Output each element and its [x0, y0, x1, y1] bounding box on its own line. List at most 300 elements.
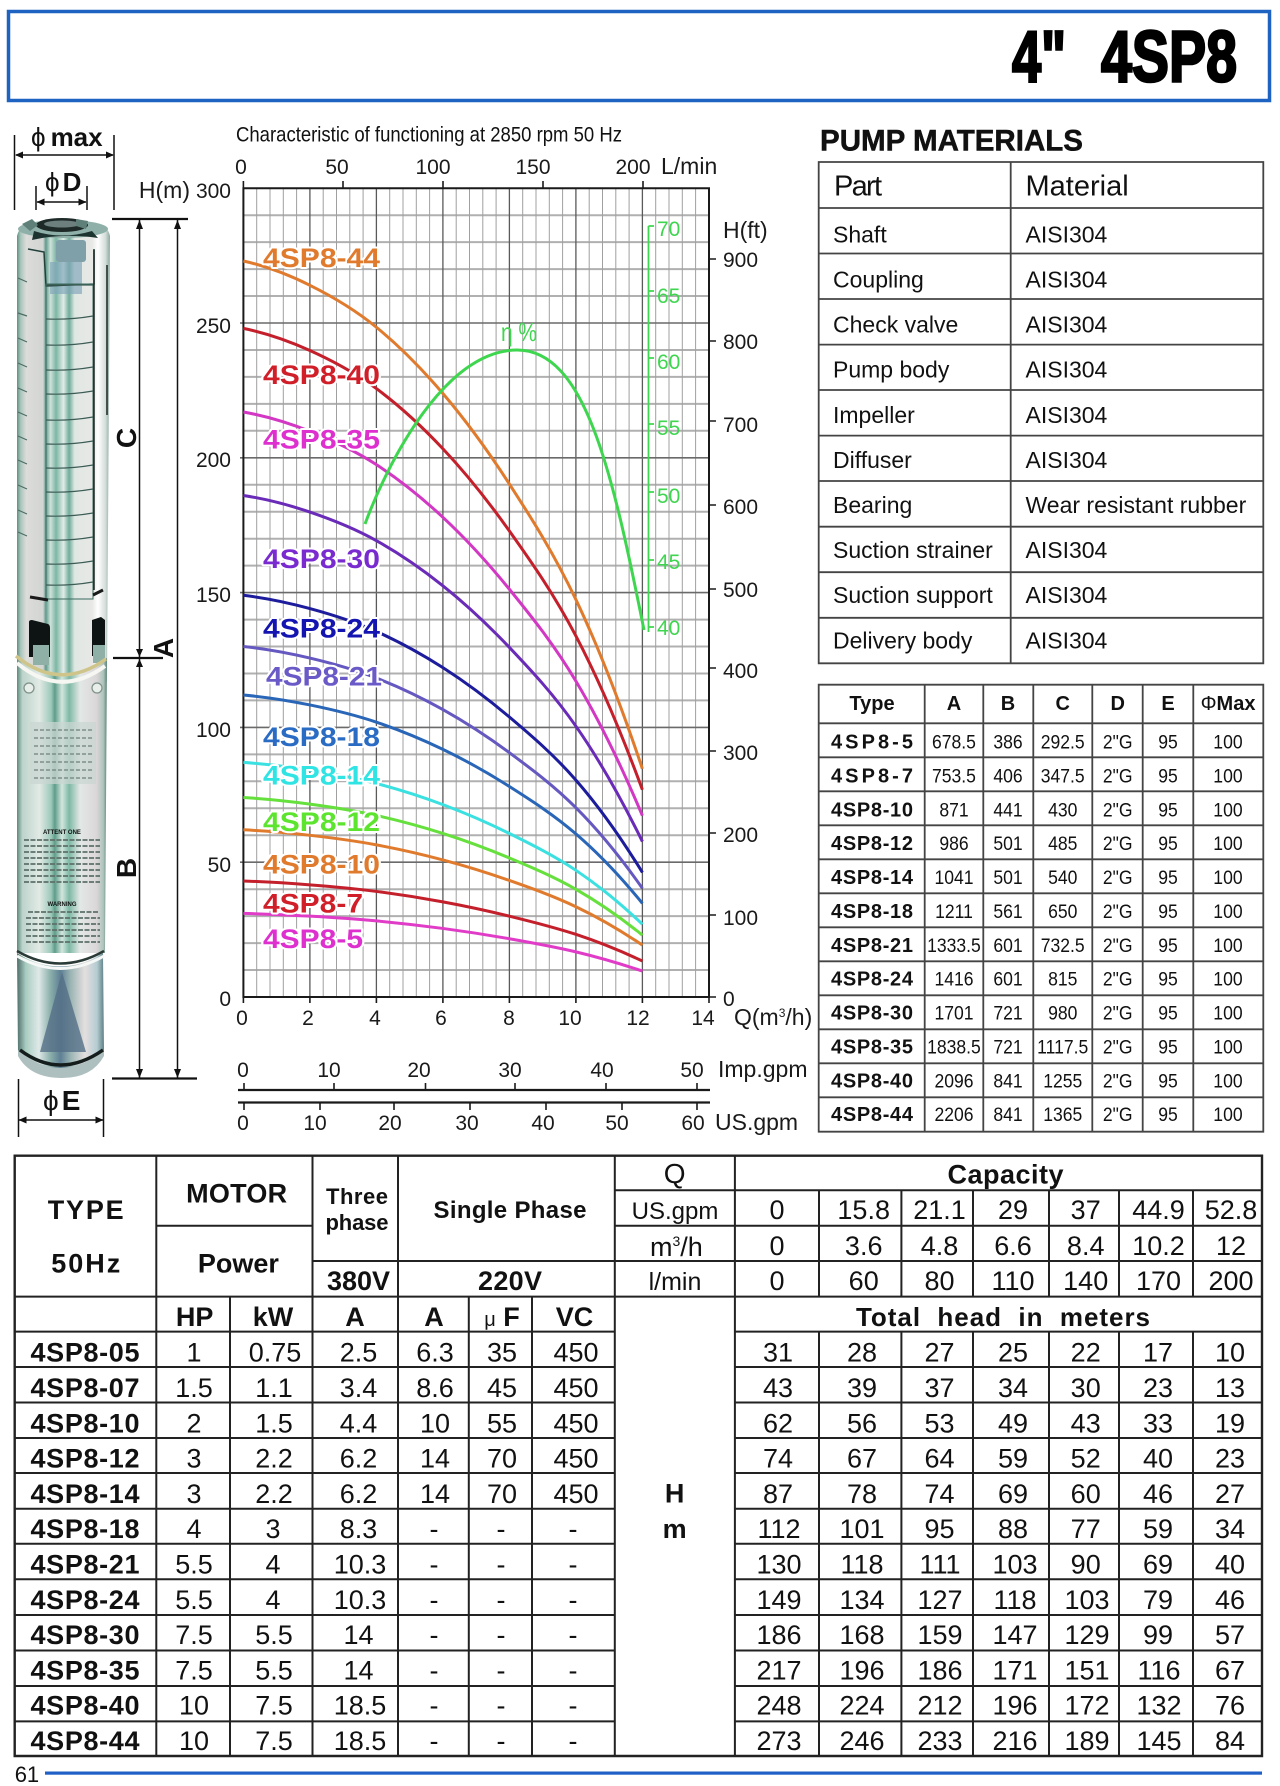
pump curve: 4SP8-10	[243, 830, 642, 945]
total head values: 186	[756, 1620, 802, 1650]
right axis H(ft): 600	[723, 496, 758, 519]
type column: 4SP8-35	[30, 1655, 140, 1685]
total head values: 168	[839, 1620, 885, 1650]
motor electrical values: 14	[420, 1479, 450, 1509]
bottom axis Q: 14	[691, 1007, 715, 1030]
total head values: 118	[840, 1550, 884, 1580]
capacity headers: 3.6	[845, 1231, 882, 1261]
US.gpm scale: US.gpm	[715, 1109, 798, 1135]
curve label: 4SP8-18: 4SP8-18	[263, 722, 380, 752]
motor electrical values: 1.1	[255, 1373, 293, 1403]
dimension lines A, B, C	[111, 219, 197, 1078]
capacity headers: 29	[998, 1195, 1028, 1225]
efficiency scale: 40	[657, 617, 680, 640]
motor electrical values: 10.3	[334, 1550, 386, 1580]
motor electrical values: -	[496, 1620, 506, 1650]
dimensions type column: 4SP8-10	[831, 799, 913, 821]
dimensions values: 601	[993, 968, 1023, 990]
motor electrical values: 4.4	[340, 1408, 377, 1438]
total head values: 28	[847, 1338, 877, 1368]
materials table	[819, 162, 1263, 663]
motor electrical values: 1	[186, 1338, 202, 1368]
total head values: 103	[992, 1550, 1038, 1580]
bottom axis Q: 4	[369, 1007, 381, 1030]
motor electrical values: 55	[487, 1408, 517, 1438]
total head values: 78	[847, 1479, 877, 1509]
materials table: Diffuser	[833, 447, 912, 473]
curve label: 4SP8-12: 4SP8-12	[263, 807, 380, 837]
performance chart	[139, 124, 812, 1135]
dimensions values: 100	[1213, 798, 1243, 821]
top axis L/min: 100	[415, 156, 451, 179]
dimensions values: 2"G	[1103, 968, 1133, 990]
motor electrical values: -	[568, 1550, 578, 1580]
total head values: 10	[1215, 1338, 1245, 1368]
materials table: Pump body	[833, 357, 950, 383]
materials table: AISI304	[1026, 221, 1108, 247]
bottom axis Q: 6	[435, 1007, 447, 1030]
dimensions values: 678.5	[932, 731, 976, 753]
dimensions values: 980	[1048, 1002, 1077, 1024]
total head values: 27	[1215, 1479, 1245, 1509]
total head values: 186	[917, 1655, 963, 1685]
dimensions values: 347.5	[1041, 765, 1085, 787]
total head values: 69	[998, 1479, 1028, 1509]
capacity headers: 110	[991, 1266, 1035, 1296]
materials table: Suction strainer	[833, 537, 993, 563]
panel: pump materials	[819, 124, 1263, 663]
right axis H(ft): 500	[723, 579, 758, 602]
dimensions values: 292.5	[1041, 731, 1085, 753]
capacity headers: 10.2	[1132, 1231, 1185, 1261]
capacity headers: H	[665, 1479, 684, 1509]
dimensions values: 2"G	[1103, 866, 1133, 888]
motor electrical values: 8.6	[416, 1373, 454, 1403]
dimensions header row: E	[1161, 693, 1175, 715]
header cells: 50Hz	[51, 1249, 120, 1279]
top axis L/min: L/min	[661, 153, 717, 179]
curve label: 4SP8-24: 4SP8-24	[263, 614, 380, 644]
dimensions values: 100	[1213, 1069, 1243, 1092]
capacity headers: Q	[664, 1158, 685, 1189]
motor electrical values: -	[430, 1726, 438, 1756]
header banner	[8, 12, 1270, 100]
motor electrical values: 70	[487, 1479, 517, 1509]
motor electrical values: 1.5	[255, 1408, 293, 1438]
pump curve: 4SP8-24	[243, 595, 642, 872]
dimensions values: 95	[1158, 1069, 1178, 1092]
type column: 4SP8-18	[30, 1514, 140, 1544]
capacity headers: 8.4	[1067, 1231, 1104, 1261]
motor electrical values: 5.5	[175, 1550, 213, 1580]
motor electrical values: 2	[186, 1408, 202, 1438]
total head values: 25	[998, 1338, 1028, 1368]
dimensions type column: 4SP8-35	[831, 1036, 913, 1058]
dimensions values: 100	[1213, 832, 1243, 854]
materials table: AISI304	[1026, 357, 1108, 383]
motor electrical values: 4	[186, 1514, 202, 1544]
top axis L/min: 0	[235, 156, 247, 179]
materials table: AISI304	[1026, 627, 1108, 653]
dimensions header row: C	[1055, 693, 1070, 715]
Imp.gpm scale: Imp.gpm	[718, 1056, 807, 1082]
US.gpm scale: 40	[531, 1112, 555, 1135]
table: motor and head performance	[15, 1156, 1262, 1756]
dimension: phi max: ϕmax	[31, 122, 103, 152]
dimensions values: 1255	[1043, 1069, 1082, 1092]
curve label: 4SP8-35: 4SP8-35	[263, 424, 380, 454]
efficiency scale: 65	[657, 285, 680, 308]
motor electrical values: -	[568, 1514, 578, 1544]
right axis H(ft): 100	[723, 907, 758, 930]
title	[1012, 18, 1237, 98]
capacity headers	[632, 1158, 1257, 1544]
motor electrical values: 3	[186, 1444, 202, 1474]
pump rating plate	[30, 722, 96, 784]
materials table: Bearing	[833, 492, 912, 518]
capacity headers: 4.8	[921, 1231, 958, 1261]
total head values: 95	[924, 1514, 955, 1544]
right axis H(ft): 900	[723, 249, 758, 272]
total head values: 39	[847, 1373, 877, 1403]
pump curve: 4SP8-12	[243, 798, 642, 935]
header cells: VC	[556, 1302, 593, 1332]
motor electrical values: -	[430, 1655, 438, 1685]
dimensions values: 721	[993, 1036, 1023, 1058]
total head values: 59	[1143, 1514, 1173, 1544]
dimensions values: 871	[939, 798, 969, 821]
total head values: 99	[1143, 1620, 1173, 1650]
efficiency scale: 60	[657, 351, 680, 374]
dimensions values: 2"G	[1103, 798, 1133, 821]
efficiency scale: 45	[657, 551, 680, 574]
capacity headers: m	[663, 1514, 687, 1544]
total head values: 60	[1071, 1479, 1101, 1509]
total head values: 23	[1143, 1373, 1173, 1403]
capacity headers: 140	[1063, 1266, 1108, 1296]
dimensions values: 95	[1158, 1002, 1178, 1024]
motor electrical values: 3	[186, 1479, 202, 1509]
total head values: 116	[1137, 1655, 1181, 1685]
type column: 4SP8-12	[30, 1444, 140, 1474]
motor electrical values: 14	[343, 1655, 374, 1685]
total head values: 88	[998, 1514, 1028, 1544]
motor electrical values: 2.5	[340, 1338, 377, 1368]
pump curve: 4SP8-30	[243, 496, 642, 842]
dimensions values: 100	[1213, 1103, 1243, 1125]
total head values: 43	[763, 1373, 793, 1403]
dimensions header row: Type	[849, 693, 895, 715]
total head values: 112	[757, 1514, 801, 1544]
total head values: 49	[998, 1408, 1028, 1438]
pump curve: 4SP8-40	[243, 328, 642, 790]
dimensions values: 2"G	[1103, 1036, 1133, 1058]
total head values: 76	[1215, 1691, 1245, 1721]
motor electrical values: 5.5	[255, 1620, 293, 1650]
dimensions values: 501	[993, 832, 1023, 854]
motor electrical values: -	[430, 1620, 438, 1650]
capacity headers: 15.8	[837, 1195, 890, 1225]
curve label: 4SP8-10: 4SP8-10	[263, 850, 380, 880]
type column: 4SP8-44	[30, 1726, 140, 1756]
motor electrical values: -	[430, 1550, 438, 1580]
total head values: 129	[1064, 1620, 1110, 1650]
dimensions values: 95	[1158, 866, 1178, 888]
dimension: phi D: ϕD	[45, 167, 81, 197]
motor electrical values: 3	[265, 1514, 281, 1544]
motor electrical values: 4	[265, 1550, 281, 1580]
motor electrical values: 6.2	[340, 1444, 377, 1474]
type column: 4SP8-40	[30, 1691, 140, 1721]
dimensions values: 95	[1158, 1036, 1178, 1058]
curve label: 4SP8-40: 4SP8-40	[263, 360, 380, 390]
motor electrical values: 7.5	[255, 1691, 293, 1721]
header cells: Power	[198, 1249, 279, 1279]
materials table: AISI304	[1026, 312, 1108, 338]
dimension: phi E	[18, 1079, 104, 1137]
header cells	[48, 1179, 593, 1332]
total head values: 30	[1071, 1373, 1101, 1403]
total head values: 40	[1215, 1550, 1245, 1580]
left axis H(m): 50	[208, 854, 231, 877]
dimensions values: 753.5	[932, 765, 976, 787]
total head values: 22	[1071, 1338, 1101, 1368]
materials table: Part	[834, 171, 882, 203]
dimensions values: 406	[993, 765, 1023, 787]
total head values: 19	[1215, 1408, 1245, 1438]
curve label: 4SP8-21: 4SP8-21	[266, 662, 382, 692]
motor electrical values: 10	[420, 1408, 450, 1438]
motor electrical values: 5.5	[175, 1585, 213, 1615]
dimensions values: 100	[1213, 968, 1243, 990]
capacity headers: 170	[1136, 1266, 1181, 1296]
bottom axis Q: 8	[503, 1007, 515, 1030]
capacity headers: /h	[680, 1232, 703, 1262]
motor electrical values: -	[496, 1655, 506, 1685]
title: 4SP8	[1101, 18, 1237, 98]
motor electrical values: -	[568, 1585, 578, 1615]
pump warning text	[24, 830, 100, 942]
dimensions values: 100	[1213, 765, 1243, 787]
dimensions values: 2"G	[1103, 934, 1133, 956]
motor electrical values: 4	[265, 1585, 281, 1615]
header cells: μ F	[484, 1302, 520, 1332]
motor electrical values: 2.2	[255, 1444, 293, 1474]
type column: 4SP8-30	[30, 1620, 140, 1650]
motor electrical values: 450	[553, 1373, 599, 1403]
motor electrical values: 7.5	[175, 1620, 213, 1650]
US.gpm scale: 60	[681, 1112, 705, 1135]
efficiency curve	[365, 350, 644, 630]
total head values: 56	[847, 1408, 877, 1438]
total head values: 74	[924, 1479, 955, 1509]
total head values: 46	[1143, 1479, 1173, 1509]
type column: 4SP8-10	[30, 1408, 140, 1438]
capacity headers: 6.6	[994, 1231, 1032, 1261]
total head values: 246	[839, 1726, 885, 1756]
materials table: AISI304	[1026, 582, 1108, 608]
dimensions values: 100	[1213, 1036, 1243, 1058]
total head values: 77	[1071, 1514, 1101, 1544]
header cells: A	[345, 1302, 365, 1332]
capacity headers: 80	[924, 1266, 955, 1296]
header cells: kW	[253, 1302, 294, 1332]
Imp.gpm scale: 20	[407, 1059, 431, 1082]
motor electrical values: 7.5	[175, 1655, 213, 1685]
total head values: 196	[992, 1691, 1038, 1721]
total head values: 40	[1143, 1444, 1173, 1474]
efficiency scale: 50	[657, 485, 680, 508]
dimensions values: 1333.5	[927, 934, 981, 956]
dimensions type column	[831, 732, 914, 1126]
pump curve: 4SP8-5	[243, 913, 642, 971]
dimensions values: 601	[993, 934, 1023, 956]
pump warning text: WARNING	[48, 902, 77, 908]
right axis H(ft): H(ft)	[723, 217, 768, 243]
motor electrical values: -	[496, 1691, 506, 1721]
footer: page number and rule	[15, 1762, 1262, 1786]
materials table: AISI304	[1026, 266, 1108, 292]
motor electrical values: 5.5	[255, 1655, 293, 1685]
dimensions values: 100	[1213, 934, 1243, 956]
motor electrical values: -	[430, 1514, 438, 1544]
materials table: Wear resistant rubber	[1026, 492, 1247, 518]
header cells: TYPE	[48, 1195, 124, 1225]
total head values: 172	[1064, 1691, 1110, 1721]
motor electrical values: 10	[179, 1726, 209, 1756]
capacity headers: 3	[672, 1233, 680, 1249]
dimensions values: 100	[1213, 866, 1243, 888]
efficiency scale	[648, 218, 680, 640]
dimensions values: 721	[993, 1002, 1023, 1024]
motor electrical values: 18.5	[334, 1726, 386, 1756]
dimensions values: 1211	[935, 900, 973, 922]
bottom axis Q: 10	[558, 1007, 582, 1030]
total head values: 52	[1071, 1444, 1101, 1474]
curve label: 4SP8-14: 4SP8-14	[263, 761, 380, 791]
left axis H(m): 0	[219, 988, 231, 1011]
motor electrical values: 0.75	[249, 1338, 301, 1368]
motor electrical values: -	[568, 1620, 578, 1650]
total head values: 43	[1071, 1408, 1101, 1438]
pump curve: 4SP8-44	[243, 261, 642, 769]
capacity headers: 52.8	[1205, 1195, 1257, 1225]
bottom axis Q: 0	[236, 1007, 248, 1030]
total head values: 59	[998, 1444, 1028, 1474]
dimensions values: 561	[993, 900, 1023, 922]
total head values: 13	[1215, 1373, 1245, 1403]
materials table: Delivery body	[833, 627, 973, 653]
motor electrical values: 1.5	[175, 1373, 213, 1403]
total head values: 149	[756, 1585, 802, 1615]
dimensions values: 986	[939, 832, 969, 854]
dimension lines A, B, C: A	[148, 638, 179, 658]
motor electrical values: 18.5	[334, 1691, 386, 1721]
motor electrical values: 14	[420, 1444, 450, 1474]
total head values: 67	[847, 1444, 877, 1474]
pump curve: 4SP8-18	[243, 695, 642, 903]
pump illustration with dimension lines	[14, 122, 197, 1137]
dimensions type column: 4SP8-24	[831, 969, 914, 991]
header cells: A	[424, 1302, 444, 1332]
motor electrical values: 10.3	[334, 1585, 386, 1615]
total head values: 118	[993, 1585, 1037, 1615]
motor electrical values: 450	[553, 1338, 599, 1368]
Imp.gpm scale: 10	[317, 1059, 341, 1082]
materials table: AISI304	[1026, 447, 1108, 473]
total head values: 74	[763, 1444, 793, 1474]
motor electrical values: -	[496, 1550, 506, 1580]
total head values: 130	[756, 1550, 802, 1580]
US.gpm scale	[237, 1102, 798, 1135]
motor electrical values: -	[430, 1691, 438, 1721]
bottom axis Q: 3	[779, 1006, 786, 1020]
Imp.gpm scale: 50	[680, 1059, 704, 1082]
US.gpm scale: 0	[237, 1112, 249, 1135]
total head values: 196	[839, 1655, 885, 1685]
dimensions values: 2"G	[1103, 1103, 1133, 1125]
dimension lines A, B, C: B	[111, 858, 142, 878]
dimensions type column: 4SP8-44	[831, 1104, 914, 1126]
dimensions values: 1041	[934, 866, 974, 888]
dimensions values: 732.5	[1041, 934, 1085, 956]
capacity headers: 44.9	[1132, 1195, 1185, 1225]
dimensions values: 2"G	[1103, 1002, 1133, 1024]
bottom axis Q: 12	[626, 1007, 650, 1030]
dimensions type column: 4SP8-14	[831, 867, 914, 889]
motor electrical values	[175, 1338, 599, 1756]
left axis H(m): 250	[196, 315, 231, 338]
dimensions values: 1117.5	[1037, 1036, 1088, 1058]
total head values: 127	[917, 1585, 963, 1615]
dimensions values: 441	[993, 798, 1023, 821]
dimensions values: 841	[993, 1103, 1023, 1125]
total head values: 101	[839, 1514, 885, 1544]
pump curve: 4SP8-35	[243, 412, 642, 816]
total head values: 224	[839, 1691, 885, 1721]
total head values: 64	[924, 1444, 955, 1474]
left axis H(m): 100	[196, 719, 231, 742]
total head values: 147	[992, 1620, 1038, 1650]
dimensions values: 95	[1158, 832, 1178, 854]
total head values: 69	[1143, 1550, 1173, 1580]
motor electrical values: 6.2	[340, 1479, 377, 1509]
motor electrical values: 2.2	[255, 1479, 293, 1509]
title: 4"	[1012, 18, 1066, 98]
total head values: 103	[1064, 1585, 1110, 1615]
Imp.gpm scale: 30	[498, 1059, 522, 1082]
top axis L/min: 50	[325, 156, 349, 179]
left axis H(m): 200	[196, 449, 231, 472]
US.gpm scale: 20	[378, 1112, 402, 1135]
type column	[30, 1338, 140, 1756]
bottom axis Q: 2	[302, 1007, 314, 1030]
right axis H(ft): 200	[723, 824, 758, 847]
right axis H(ft): 800	[723, 331, 758, 354]
motor electrical values: 7.5	[255, 1726, 293, 1756]
total head values: 189	[1064, 1726, 1110, 1756]
US.gpm scale: 30	[455, 1112, 479, 1135]
type column: 4SP8-21	[30, 1550, 140, 1580]
motor electrical values: 8.3	[340, 1514, 377, 1544]
dimensions values: 2"G	[1103, 900, 1133, 922]
bottom axis Q: Q(m	[734, 1004, 779, 1030]
capacity headers: US.gpm	[632, 1198, 718, 1225]
Imp.gpm scale: 40	[590, 1059, 614, 1082]
dimensions values: 540	[1048, 866, 1077, 888]
dimensions values: 386	[993, 731, 1023, 753]
total head values: 111	[919, 1550, 961, 1580]
